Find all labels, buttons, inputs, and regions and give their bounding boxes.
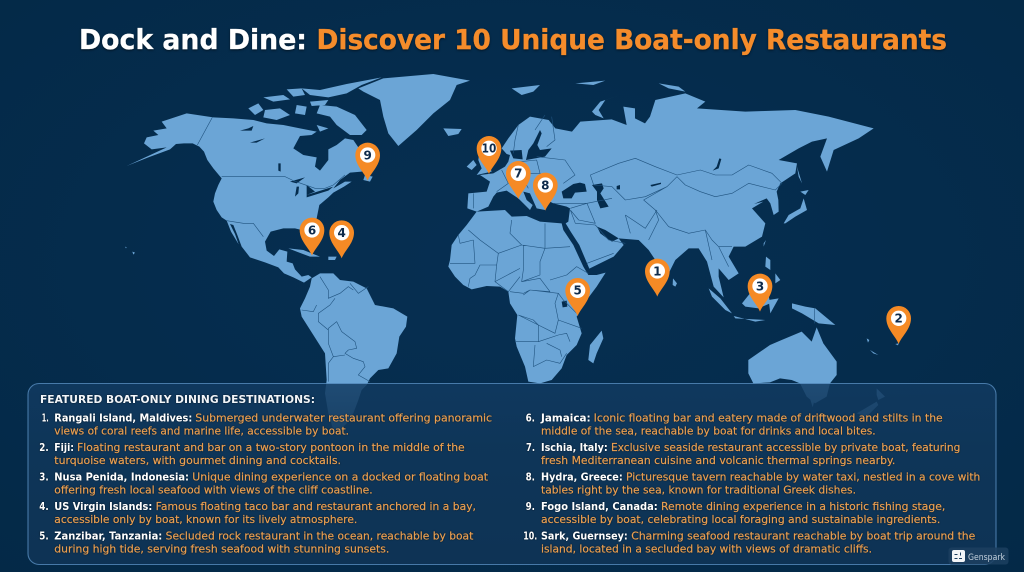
pin 8: 8 [541, 178, 549, 192]
Arctic Eurasian islands [512, 81, 685, 118]
pin 6: 6 [308, 223, 316, 237]
item 8: Hydra, Greece: [541, 472, 623, 484]
pin 3 [748, 274, 772, 312]
item 7: Exclusive seaside restaurant accessible by private boat, featuring [611, 442, 960, 454]
item 4: Famous floating taco bar and restaurant anchored in a bay, [156, 501, 476, 513]
world map [125, 74, 899, 430]
Black Sea [562, 183, 587, 198]
Africa [448, 210, 606, 383]
inland waters [240, 126, 721, 307]
Japan, Sakhalin, Taiwan, Sri Lanka [673, 167, 809, 287]
pin 7 [506, 161, 531, 199]
item 1: views of coral reefs and marine life, accessible by boat. [54, 426, 349, 438]
panel heading: FEATURED BOAT-ONLY DINING DESTINATIONS: [40, 393, 315, 406]
item 8 [526, 472, 980, 496]
pin 10 [477, 136, 501, 174]
British Isles [467, 147, 492, 175]
item 8: Picturesque tavern reachable by water taxi, nestled in a cove with [626, 472, 980, 484]
title: Discover 10 Unique Boat-only Restaurants [316, 24, 947, 56]
item 5 [39, 530, 473, 556]
item 6: middle of the sea, reachable by boat for drinks and local bites. [541, 426, 876, 438]
pin 9: 9 [363, 148, 372, 162]
Eurasia [467, 93, 874, 297]
icon: Genspark logo [952, 550, 965, 562]
item 2: Floating restaurant and bar on a two-story pontoon in the middle of the [77, 442, 465, 454]
item 10: 10. [523, 530, 537, 542]
Arctic islands, Newfoundland and Caribbean [248, 77, 382, 260]
item 7: fresh Mediterranean cuisine and volcanic thermal springs nearby. [541, 455, 895, 467]
pin 2: 2 [894, 312, 903, 326]
item 1: Submerged underwater restaurant offering panoramic [195, 412, 492, 424]
item 6: Iconic floating bar and eatery made of driftwood and stilts in the [594, 412, 943, 424]
item 2 [39, 442, 465, 467]
item 8: 8. [526, 472, 535, 484]
item 5: 5. [39, 530, 49, 542]
pin 7: 7 [514, 167, 523, 181]
title: Dock and Dine: [79, 24, 307, 56]
item 6: 6. [526, 412, 535, 424]
pin 5 [565, 278, 590, 316]
item 3: Unique dining experience on a docked or floating boat [192, 472, 488, 484]
item 3: 3. [39, 472, 49, 484]
item 2: Fiji: [54, 442, 74, 454]
pin 5: 5 [573, 284, 582, 298]
pin 1 [645, 259, 670, 297]
Madagascar [588, 331, 603, 363]
item 3: Nusa Penida, Indonesia: [54, 472, 189, 484]
pin 1: 1 [653, 264, 661, 278]
map pins [300, 136, 911, 344]
pin 8 [533, 173, 558, 211]
Greenland and Iceland [358, 74, 470, 146]
Tasmania and New Zealand [810, 388, 885, 417]
item 6 [526, 412, 943, 438]
info panel [28, 384, 996, 564]
pin 3: 3 [756, 279, 764, 293]
Baikal, Balkhash and Aral [617, 158, 721, 189]
item 3: offering fresh local seafood with views of the cliff coastline. [54, 484, 373, 496]
item 10: Charming seafood restaurant reachable by boat trip around the [631, 530, 975, 542]
pin 9 [355, 143, 380, 181]
item 4: accessible only by boat, known for its lively atmosphere. [54, 514, 357, 526]
item 6: Jamaica: [540, 412, 591, 424]
item 9: accessible by boat, celebrating local foraging and sustainable ingredients. [541, 514, 940, 526]
item 7 [526, 442, 960, 467]
pin 2 [886, 306, 911, 344]
item 9: 9. [526, 501, 535, 513]
small Pacific islands [125, 247, 899, 355]
item 3 [39, 472, 488, 496]
item 1 [42, 412, 492, 438]
item 5: Zanzibar, Tanzania: [54, 530, 162, 542]
item 10: Sark, Guernsey: [541, 530, 628, 542]
pin 6 [300, 218, 324, 256]
item 4 [39, 501, 476, 526]
item 1: Rangali Island, Maldives: [54, 412, 192, 424]
Persian Gulf [597, 227, 619, 242]
left destination list [39, 412, 492, 556]
South America [300, 273, 407, 430]
item 4: US Virgin Islands: [54, 501, 152, 513]
Baltic and Kattegat [510, 130, 552, 160]
right destination list [523, 412, 980, 556]
Australia [748, 327, 837, 403]
country borders [197, 115, 814, 382]
item 2: 2. [39, 442, 49, 454]
item 2: turquoise waters, with gourmet dining and cocktails. [54, 455, 341, 467]
item 4: 4. [39, 501, 49, 513]
item 9 [526, 501, 945, 526]
pin 10: 10 [482, 142, 496, 156]
item 7: 7. [526, 442, 535, 454]
North America [127, 113, 370, 283]
Genspark badge [948, 548, 1008, 564]
Genspark badge: Genspark [968, 553, 1005, 563]
item 5: Secluded rock restaurant in the ocean, reachable by boat [166, 530, 473, 542]
item 1: 1. [42, 412, 49, 424]
item 10: island, located in a secluded bay with views of dramatic cliffs. [541, 544, 872, 556]
item 10 [523, 530, 975, 556]
Caspian Sea [592, 183, 609, 208]
item 8: tables right by the sea, known for traditional Greek dishes. [541, 484, 856, 496]
Lake Victoria [562, 301, 567, 307]
item 9: Fogo Island, Canada: [541, 501, 658, 513]
Southeast Asia islands [709, 257, 835, 325]
great lakes and Canadian lakes [240, 126, 333, 197]
item 9: Remote dining experience in a historic fishing stage, [661, 501, 945, 513]
item 5: during high tide, serving fresh seafood with stunning sunsets. [54, 544, 389, 556]
land masses [125, 74, 899, 430]
pin 4: 4 [337, 226, 346, 240]
pin 4 [329, 220, 354, 258]
item 7: Ischia, Italy: [541, 442, 608, 454]
